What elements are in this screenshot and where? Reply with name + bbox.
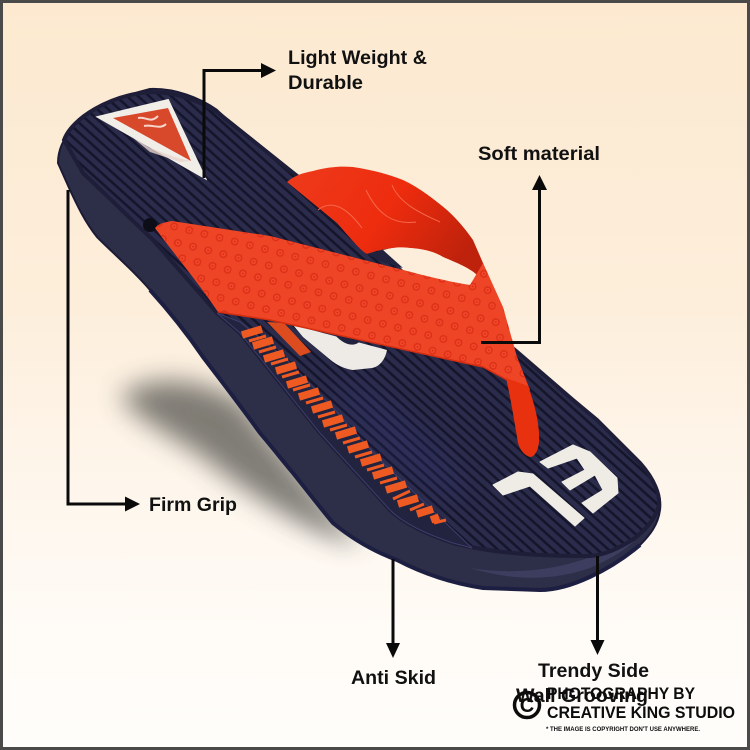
label: trendy side wall grooving: Trendy Side <box>538 661 649 682</box>
label: firm grip: Firm Grip <box>149 495 237 516</box>
flat side panel of footbed <box>217 313 472 548</box>
arrow: trendy side wall grooving <box>590 556 604 655</box>
strap slot <box>143 218 157 232</box>
outsole lower edge <box>150 290 640 590</box>
arrow: light weight <box>204 63 276 178</box>
flip flop product photo <box>58 89 660 590</box>
strap hole shadow <box>367 250 403 268</box>
footbed with grooves <box>64 92 659 556</box>
watermark studio name <box>547 684 735 722</box>
label: anti skid: Anti Skid <box>351 668 436 689</box>
label: light weight: Durable <box>288 73 363 94</box>
strap hole <box>383 247 476 285</box>
label: soft material: Soft material <box>478 144 600 165</box>
orange mid-sole block <box>267 322 311 356</box>
toe post <box>506 378 539 457</box>
front strap <box>155 221 530 390</box>
icon: copyright symbol: C <box>520 695 534 717</box>
watermark notice: * THE IMAGE IS COPYRIGHT DON'T USE ANYWHERE. <box>546 726 700 733</box>
heel triangle logo <box>98 100 205 178</box>
watermark studio name: CREATIVE KING STUDIO <box>547 703 735 722</box>
back strap <box>287 167 490 285</box>
watermark studio name: PHOTOGRAPHY BY <box>547 684 696 703</box>
icon: copyright symbol <box>514 692 540 718</box>
toe logo <box>493 445 618 526</box>
sole side wall <box>58 89 660 590</box>
arrow: soft material <box>481 175 547 342</box>
label: light weight <box>288 48 427 94</box>
drop shadow <box>120 381 360 545</box>
white mid logo <box>293 325 387 370</box>
side wall highlight at toe <box>470 525 645 578</box>
arrow: anti skid <box>386 559 400 658</box>
label: light weight: Light Weight & <box>288 48 427 69</box>
arrow: firm grip <box>68 190 140 512</box>
side orange bars <box>242 329 446 523</box>
white logo notch <box>335 335 360 345</box>
label: trendy side wall grooving <box>516 661 649 707</box>
watermark <box>514 684 735 733</box>
label: trendy side wall grooving: Wall Grooving <box>516 686 648 707</box>
